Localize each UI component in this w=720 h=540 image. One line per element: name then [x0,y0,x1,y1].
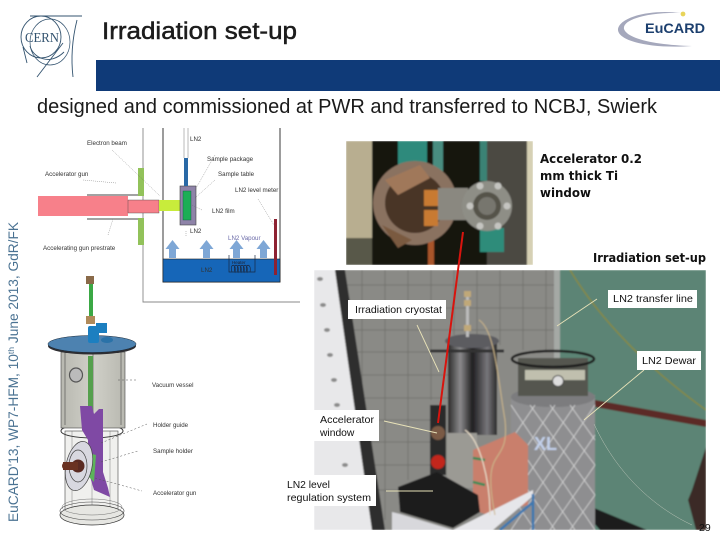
logo: CERN [21,16,82,77]
model labels [152,382,197,497]
photo: irradiation set-up [314,270,706,530]
stand under cryostat [447,433,477,488]
left white strut [314,270,372,530]
wall stripe [595,400,706,427]
label: LN2 transfer line [608,290,697,308]
leader lines [95,380,147,491]
accelerator gun [61,439,97,493]
label: LN2 Dewar [637,351,701,370]
table [392,512,453,530]
accelerator gun [38,195,159,219]
photo: accelerator window [346,141,533,265]
cryostat [430,291,504,435]
photo labels [282,290,701,506]
beige tube [479,320,506,515]
green wall [558,270,706,530]
model labels: Holder guide [153,422,189,429]
label: LN2 level regulation system: LN2 level [287,480,330,491]
diagram labels [43,136,278,274]
electron beam [159,200,183,211]
photo leader lines [384,299,692,525]
model labels: Vacuum vessel [152,382,194,389]
diagram labels: LN2 Vapour [228,235,261,242]
logo: EuCARD [618,12,705,47]
vertical footer text: th [6,347,16,354]
sample package [180,128,196,225]
diagram labels: LN2 [190,228,202,235]
3D cryostat model [48,276,197,525]
pink can [473,432,528,514]
vessel upper [61,352,125,428]
diagram labels: Sample package [207,156,254,163]
holder guide [80,406,110,497]
model labels: Sample holder [153,448,193,455]
flange [138,168,144,196]
wall tiles [340,270,554,520]
label: irradiation set-up: Irradiation set-up [593,250,706,265]
title: Irradiation set-up [102,18,297,45]
level meter [274,219,277,275]
page number: 29 [699,522,711,534]
dewar: XL [534,434,557,454]
diagram labels: Accelerating gun prestrate [43,245,116,252]
label: irradiation cryostat: Irradiation cryostat [355,305,442,316]
diagram labels: LN2 level meter [235,187,278,194]
vertical footer text: EuCARD'13, WP7-HFM, 10 [6,357,21,522]
label: accelerator window: Accelerator 0.2 [540,151,642,166]
sample holder [85,452,96,482]
red object and window [430,405,446,475]
green rod [89,282,93,316]
black box [398,472,480,528]
label: LN2 level regulation system [282,475,376,506]
label: LN2 transfer line: LN2 transfer line [613,294,693,305]
vapour arrows [166,240,270,258]
diagram labels: Heater [232,260,246,265]
label: accelerator window [314,410,379,441]
label: accelerator window: window [319,428,355,439]
LN2 bath [163,259,280,282]
top fitting [86,276,94,284]
diagram labels: LN2 [190,136,202,143]
label: accelerator window: window [540,185,591,200]
label: LN2 Dewar: LN2 Dewar [642,356,697,367]
cable on wall [570,270,706,410]
logo: CERN: CERN [25,30,59,45]
model labels: Accelerator gun [153,490,197,497]
red pointer line [438,232,463,423]
subtitle: designed and commissioned at PWR and transferred to NCBJ, Swierk [37,96,658,118]
diagram labels: LN2 film [212,208,235,215]
diagram labels: LN2 [201,267,213,274]
header bar [96,60,720,91]
label: irradiation cryostat [348,300,446,319]
diagram labels: Accelerator gun [45,171,89,178]
fittings [86,316,113,343]
logo: EuCARD: EuCARD [645,20,705,36]
diagram labels: Sample table [218,171,255,178]
label: LN2 level regulation system: regulation system [287,493,371,504]
label: accelerator window [540,151,642,200]
schematic: accelerator and cryostat [38,128,300,302]
label: accelerator window: mm thick Ti [540,168,618,183]
label: accelerator window: Accelerator [320,415,375,426]
dewar [511,351,595,530]
vessel lower glass [65,431,118,513]
person [688,447,706,530]
vertical footer text: June 2013, GdR/FK [6,222,21,347]
lid [48,338,136,354]
diagram labels: Electron beam [87,140,127,147]
